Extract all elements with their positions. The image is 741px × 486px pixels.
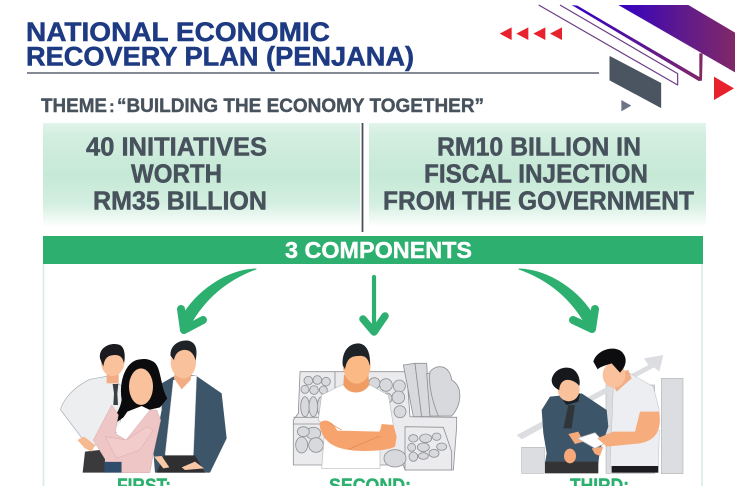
panel: RM10 billion: FROM THE GOVERNMENT xyxy=(383,188,694,216)
arrow: left xyxy=(180,269,256,330)
thin purple line xyxy=(539,5,678,85)
title: NATIONAL ECONOMIC xyxy=(26,17,330,47)
theme line: : xyxy=(109,97,115,116)
purple parallelogram xyxy=(618,5,735,72)
thick purple line xyxy=(572,5,703,81)
small grey triangle xyxy=(621,100,631,111)
panel: RM10 billion: FISCAL INJECTION xyxy=(424,160,648,188)
red triangle xyxy=(714,77,734,100)
panel: 40 initiatives xyxy=(43,123,360,227)
panel: 40 initiatives: WORTH xyxy=(131,160,222,188)
panel: 40 initiatives: 40 INITIATIVES xyxy=(86,134,267,162)
man in jacket xyxy=(542,368,608,473)
vegetable stall xyxy=(293,363,460,470)
illustration: market trader xyxy=(293,343,460,470)
decorative header shapes xyxy=(500,5,735,111)
left man xyxy=(61,344,125,473)
title xyxy=(26,17,414,72)
man with crossed arms xyxy=(318,343,397,468)
components banner xyxy=(43,236,703,264)
panel: 40 initiatives: RM35 BILLION xyxy=(93,188,267,216)
arrow: middle xyxy=(363,277,385,332)
grey parallelogram xyxy=(610,57,661,107)
illustration: three business people xyxy=(61,340,227,473)
man in white shirt xyxy=(577,349,660,473)
right man xyxy=(153,340,227,473)
components banner: 3 COMPONENTS xyxy=(285,237,472,263)
red left triangles xyxy=(500,27,562,40)
theme line: THEME xyxy=(41,95,107,117)
woman xyxy=(93,359,167,473)
illustration: two colleagues and growth chart xyxy=(517,349,683,474)
title: RECOVERY PLAN (PENJANA) xyxy=(26,42,414,72)
theme line: “BUILDING THE ECONOMY TOGETHER” xyxy=(117,95,484,117)
growth chart xyxy=(517,355,683,474)
arrow: right xyxy=(519,269,596,329)
panel: RM10 billion: RM10 BILLION IN xyxy=(437,134,641,162)
panel: RM10 billion xyxy=(369,123,706,227)
